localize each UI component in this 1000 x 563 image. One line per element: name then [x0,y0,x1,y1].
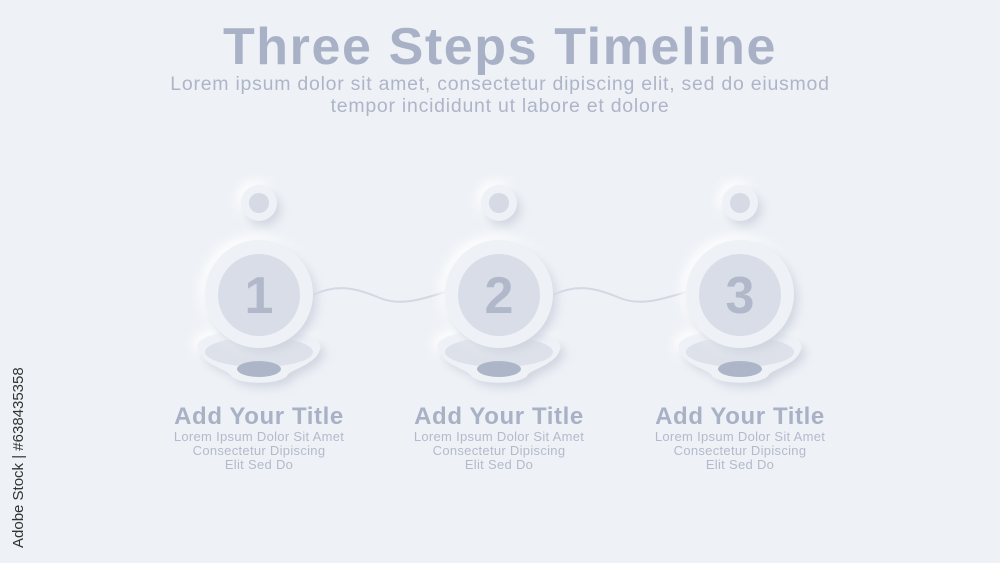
step 3 text [655,403,825,472]
step 2 text: Elit Sed Do [465,457,533,472]
subtitle: tempor incididunt ut labore et dolore [331,95,669,117]
step 3 graphic [678,185,802,383]
step 2 text: Lorem Ipsum Dolor Sit Amet [414,429,584,444]
stock id: Adobe Stock | #638435358 [10,367,27,548]
step 3 text: Lorem Ipsum Dolor Sit Amet [655,429,825,444]
connector: wavy line 2-3 [553,288,686,302]
step 1 text [174,403,344,472]
step 3 text: Consectetur Dipiscing [674,443,806,458]
step 1 text: Consectetur Dipiscing [193,443,325,458]
step 1 text: Lorem Ipsum Dolor Sit Amet [174,429,344,444]
step 2 graphic: 2 [485,267,513,325]
subtitle: Lorem ipsum dolor sit amet, consectetur dipiscing elit, sed do eiusmod [170,73,830,95]
step 3 graphic: 3 [726,267,754,325]
step 1 text: Add Your Title [174,403,344,430]
step 2 text: Consectetur Dipiscing [433,443,565,458]
subtitle [170,73,830,117]
connector: wavy line 1-2 [313,288,445,302]
step 1 graphic: 1 [245,267,273,325]
step 2 graphic [437,185,561,383]
step 3 text: Elit Sed Do [706,457,774,472]
step 2 text [414,403,584,472]
step 3 text: Add Your Title [655,403,825,430]
step 1 graphic [197,185,321,383]
step 1 text: Elit Sed Do [225,457,293,472]
title: Three Steps Timeline [223,18,777,76]
step 2 text: Add Your Title [414,403,584,430]
